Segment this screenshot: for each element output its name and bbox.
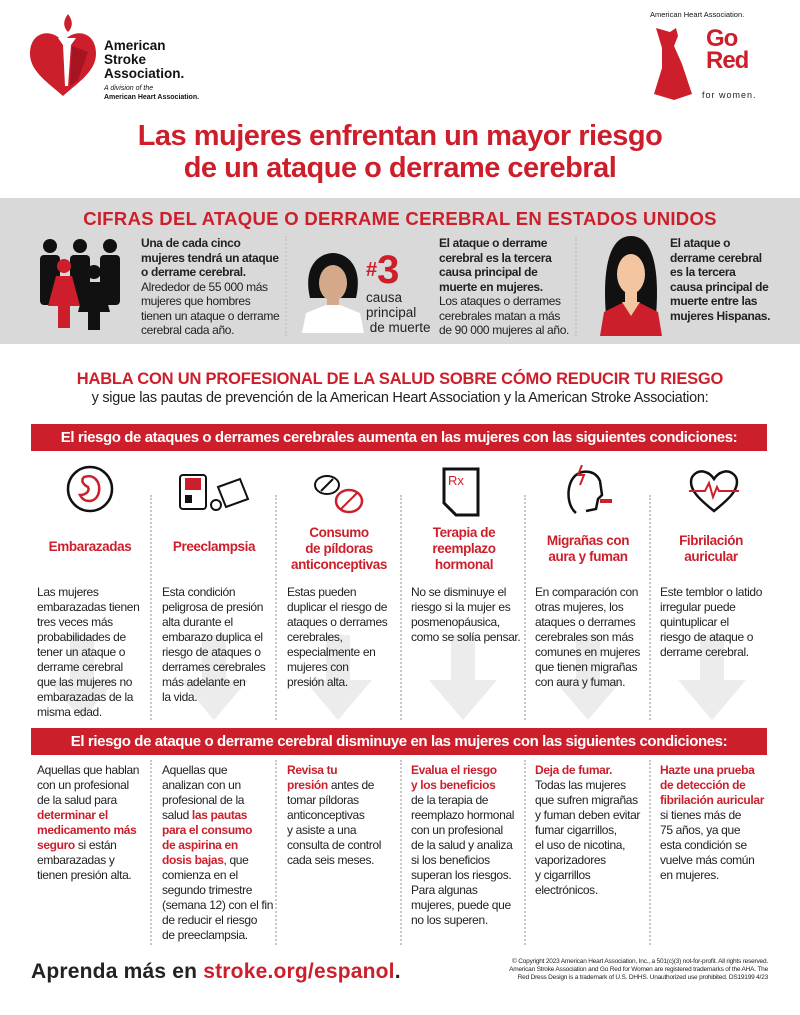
bottom column 5 bbox=[535, 763, 640, 897]
bottom column 6: en mujeres. bbox=[660, 868, 719, 882]
column 5: migraines bbox=[535, 465, 640, 689]
text bbox=[37, 585, 140, 719]
logo: American Stroke Association: American Heart Association. bbox=[104, 94, 199, 101]
text: cerebrales son más bbox=[535, 630, 633, 644]
bottom column 2: Aquellas que bbox=[162, 763, 227, 777]
bottom column 2 bbox=[162, 763, 273, 942]
text: quintuplicar el bbox=[660, 615, 729, 629]
text: posmenopáusica, bbox=[411, 615, 500, 629]
icon: hispanic woman bbox=[600, 236, 662, 336]
text: derrames cerebrales bbox=[162, 660, 265, 674]
banner: risk increases bbox=[31, 424, 767, 451]
text: tres veces más bbox=[37, 615, 113, 629]
title: de un ataque o derrame cerebral bbox=[184, 152, 616, 184]
bottom column 5: vaporizadores bbox=[535, 853, 606, 867]
panel: stats band bbox=[0, 198, 800, 344]
logo: American Stroke Association: A division of the bbox=[104, 85, 153, 92]
column 4: hormone therapy bbox=[411, 468, 520, 644]
text: En comparación con bbox=[535, 585, 638, 599]
text: Este temblor o latido bbox=[660, 585, 762, 599]
title bbox=[138, 120, 662, 184]
text: misma edad. bbox=[37, 705, 102, 719]
bottom column 5: electrónicos. bbox=[535, 883, 598, 897]
text bbox=[660, 585, 762, 659]
bottom column 1: determinar el bbox=[37, 808, 108, 822]
stat: #3 cause: principal bbox=[366, 305, 416, 320]
heading: aura y fuman bbox=[548, 549, 628, 564]
heading: Terapia de bbox=[433, 525, 495, 540]
text: one in five: mujeres que hombres bbox=[141, 294, 250, 308]
stats heading: CIFRAS DEL ATAQUE O DERRAME CEREBRAL EN ESTADOS UNIDOS bbox=[83, 208, 717, 229]
text: comunes en mujeres bbox=[535, 645, 640, 659]
text: hispanic women: es la tercera bbox=[670, 265, 736, 279]
bottom column 6: de detección de bbox=[660, 778, 745, 792]
icon: prescription bbox=[442, 468, 480, 516]
text: third cause: de 90 000 mujeres al año. bbox=[439, 323, 569, 337]
footer: copyright: Red Dress Design is a trademark of U.S. DHHS. Unauthorized use prohibited. DS19199 4/23 bbox=[518, 974, 768, 981]
text: third cause: cerebrales matan a más bbox=[439, 308, 560, 322]
heading: de píldoras bbox=[305, 541, 373, 556]
icon: blood pressure monitor bbox=[179, 474, 250, 511]
footer: learn more: Aprenda más en stroke.org/espanol. bbox=[31, 960, 401, 983]
text: riesgo de ataques o bbox=[162, 645, 261, 659]
text: Esta condición bbox=[162, 585, 235, 599]
bottom column 2: segundo trimestre bbox=[162, 883, 252, 897]
arrows (background) bbox=[49, 635, 746, 720]
heading: Preeclampsia bbox=[173, 539, 255, 554]
bottom column 6: si tienes más de bbox=[660, 808, 741, 822]
bottom column 5: y cigarrillos bbox=[535, 868, 590, 882]
logo: Go Red for Women: Go bbox=[706, 25, 737, 52]
bottom column 6: Hazte una prueba bbox=[660, 763, 754, 777]
logo: Go Red for Women: American Heart Association. bbox=[650, 10, 744, 19]
stat: #3 cause: de muerte bbox=[370, 320, 431, 335]
heading bbox=[291, 525, 387, 572]
text: como se solía pensar. bbox=[411, 630, 520, 644]
bottom column 4: y los beneficios bbox=[411, 778, 495, 792]
heading: talk to a professional: HABLA CON UN PROFESIONAL DE LA SALUD SOBRE CÓMO REDUCIR TU RIESGO bbox=[77, 370, 723, 388]
text: hispanic women: derrame cerebral bbox=[670, 250, 762, 264]
text: peligrosa de presión bbox=[162, 600, 263, 614]
text: ataques o derrames bbox=[287, 615, 387, 629]
text bbox=[535, 585, 640, 689]
bottom column 4 bbox=[411, 763, 514, 927]
text: one in five: Una de cada cinco bbox=[141, 236, 240, 250]
bottom column 3: anticonceptivas bbox=[287, 808, 364, 822]
icon: group of women bbox=[40, 239, 120, 330]
heading: reemplazo bbox=[432, 541, 496, 556]
bottom column 1: Aquellas que hablan bbox=[37, 763, 139, 777]
text: one in five: mujeres tendrá un ataque bbox=[141, 250, 279, 264]
heading bbox=[547, 533, 629, 564]
heading: Migrañas con bbox=[547, 533, 629, 548]
text: otras mujeres, los bbox=[535, 600, 623, 614]
bottom column 3: y asiste a una bbox=[287, 823, 356, 837]
bottom column 1: de la salud para bbox=[37, 793, 117, 807]
text: hispanic women bbox=[670, 236, 770, 322]
bottom column 3: cada seis meses. bbox=[287, 853, 374, 867]
stat: #3 cause: causa bbox=[366, 290, 402, 305]
logo: American Stroke Association bbox=[30, 14, 199, 101]
text: hispanic women: El ataque o bbox=[670, 236, 730, 250]
bottom column 2: de aspirina en bbox=[162, 838, 238, 852]
logo: Go Red for Women: for women. bbox=[702, 90, 757, 100]
title: Las mujeres enfrentan un mayor riesgo bbox=[138, 120, 662, 152]
bottom column 2: de reducir el riesgo bbox=[162, 913, 257, 927]
stat: #3 cause: #3 bbox=[366, 248, 399, 292]
text: mujeres con bbox=[287, 660, 349, 674]
bottom column 4: no los superen. bbox=[411, 913, 488, 927]
bottom column 4: mujeres, puede que bbox=[411, 898, 511, 912]
bottom column 5: y fuman deben evitar bbox=[535, 808, 640, 822]
logo: American Stroke Association: Association. bbox=[104, 66, 184, 81]
bottom column 2: profesional de la bbox=[162, 793, 244, 807]
text: Estas pueden bbox=[287, 585, 356, 599]
bottom column 5: Deja de fumar. bbox=[535, 763, 612, 777]
text: presión alta. bbox=[287, 675, 348, 689]
bottom column 1: con un profesional bbox=[37, 778, 129, 792]
bottom column 2: comienza en el bbox=[162, 868, 238, 882]
icon: pills bbox=[314, 475, 364, 514]
text: third cause: muerte en mujeres. bbox=[439, 280, 543, 294]
bottom column 2: analizan con un bbox=[162, 778, 241, 792]
text: derrame cerebral. bbox=[660, 645, 749, 659]
bottom column 3: Revisa tu bbox=[287, 763, 337, 777]
text: third cause: cerebral es la tercera bbox=[439, 250, 551, 264]
text: probabilidades de bbox=[37, 630, 126, 644]
text: embarazo duplica el bbox=[162, 630, 263, 644]
bottom column 2: (semana 12) con el fin bbox=[162, 898, 273, 912]
column 2: Preeclampsia bbox=[162, 474, 266, 704]
icon: heart with pulse bbox=[689, 470, 739, 513]
bottom column 5: fumar cigarrillos, bbox=[535, 823, 617, 837]
bottom column 3 bbox=[287, 763, 381, 867]
logo: Go Red for Women: Red bbox=[706, 47, 748, 74]
text: third cause bbox=[439, 236, 569, 337]
text: alta durante el bbox=[162, 615, 233, 629]
text bbox=[162, 585, 266, 704]
text: riesgo de ataque o bbox=[660, 630, 753, 644]
bottom column 3: consulta de control bbox=[287, 838, 381, 852]
text: one in five: o derrame cerebral. bbox=[141, 265, 246, 279]
text: hispanic women: mujeres Hispanas. bbox=[670, 308, 770, 322]
footer: copyright: American Stroke Association and Go Red for Women are registered trademarks of the AHA. The bbox=[509, 966, 768, 973]
bottom column 6: 75 años, ya que bbox=[660, 823, 740, 837]
text: la vida. bbox=[162, 690, 197, 704]
bottom column 5: que sufren migrañas bbox=[535, 793, 638, 807]
bottom column 1: embarazadas y bbox=[37, 853, 114, 867]
stat: #3 cause bbox=[366, 248, 431, 335]
text: one in five: tienen un ataque o derrame bbox=[141, 308, 279, 322]
bottom column 1: medicamento más bbox=[37, 823, 136, 837]
heading: anticonceptivas bbox=[291, 557, 387, 572]
text: one in five bbox=[141, 236, 280, 337]
heading: Fibrilación bbox=[679, 533, 743, 548]
text: que tienen migrañas bbox=[535, 660, 637, 674]
bottom column 4: de la terapia de bbox=[411, 793, 488, 807]
heading bbox=[432, 525, 496, 572]
bottom column 4: con un profesional bbox=[411, 823, 503, 837]
logo: American Stroke Association: American bbox=[104, 38, 166, 53]
bottom column 2: para el consumo bbox=[162, 823, 252, 837]
text: third cause: causa principal de bbox=[439, 265, 537, 279]
logo: Go Red for Women bbox=[650, 10, 757, 100]
text: que las mujeres no bbox=[37, 675, 132, 689]
icon: head with migraine and cigarette bbox=[567, 465, 612, 514]
heading: Consumo bbox=[309, 525, 369, 540]
footer: copyright bbox=[440, 958, 768, 982]
text: con aura y fuman. bbox=[535, 675, 625, 689]
column 6: atrial fibrillation bbox=[660, 470, 762, 659]
text: duplicar el riesgo de bbox=[287, 600, 387, 614]
footer: copyright: © Copyright 2023 American Heart Association, Inc., a 501(c)(3) not-for-profit. All rights reserved. bbox=[512, 958, 768, 965]
heading: Embarazadas bbox=[49, 539, 131, 554]
bottom column 4: de la salud y analiza bbox=[411, 838, 512, 852]
dividers bbox=[150, 495, 152, 720]
heading bbox=[679, 533, 743, 564]
text: embarazadas de la bbox=[37, 690, 133, 704]
text: especialmente en bbox=[287, 645, 375, 659]
bottom column 3: tomar píldoras bbox=[287, 793, 359, 807]
bottom column 4: Evalua el riesgo bbox=[411, 763, 497, 777]
bottom column 3: presión antes de bbox=[287, 778, 374, 792]
text: ataques o derrames bbox=[535, 615, 635, 629]
text: third cause: El ataque o derrame bbox=[439, 236, 547, 250]
text: más adelante en bbox=[162, 675, 245, 689]
text: riesgo si la mujer es bbox=[411, 600, 510, 614]
text: tener un ataque o bbox=[37, 645, 125, 659]
heading: talk to a professional bbox=[77, 369, 723, 406]
text: one in five: Alrededor de 55 000 más bbox=[141, 280, 268, 294]
bottom column 4: Para algunas bbox=[411, 883, 478, 897]
logo: American Stroke Association: Stroke bbox=[104, 52, 146, 67]
bottom column 1 bbox=[37, 763, 139, 882]
banner: risk increases: El riesgo de ataques o derrames cerebrales aumenta en las mujeres con las siguientes condiciones: bbox=[61, 429, 737, 446]
text: embarazadas tienen bbox=[37, 600, 139, 614]
text: one in five: cerebral cada año. bbox=[141, 323, 234, 337]
heading: talk to a professional: y sigue las pautas de prevención de la American Heart Association y la American Stroke Association: bbox=[92, 390, 708, 406]
text: third cause: Los ataques o derrames bbox=[439, 294, 561, 308]
bottom column 2: dosis bajas, que bbox=[162, 853, 248, 867]
bottom column 4: si los beneficios bbox=[411, 853, 490, 867]
text: Las mujeres bbox=[37, 585, 99, 599]
heading: hormonal bbox=[435, 557, 493, 572]
text bbox=[411, 585, 520, 644]
text: derrame cerebral bbox=[37, 660, 123, 674]
text bbox=[287, 585, 388, 689]
banner: risk decreases: El riesgo de ataque o derrame cerebral disminuye en las mujeres con las siguientes condiciones: bbox=[71, 733, 727, 750]
icon: woman portrait bbox=[302, 253, 364, 333]
bottom column 6 bbox=[660, 763, 764, 882]
text: hispanic women: causa principal de bbox=[670, 280, 768, 294]
heading: auricular bbox=[684, 549, 738, 564]
text: No se disminuye el bbox=[411, 585, 506, 599]
bottom column 4: superan los riesgos. bbox=[411, 868, 511, 882]
bottom column 1: tienen presión alta. bbox=[37, 868, 131, 882]
text: hispanic women: muerte entre las bbox=[670, 294, 757, 308]
bottom column 1: seguro si están bbox=[37, 838, 116, 852]
icon: fetus bbox=[66, 466, 114, 512]
icon: prescription: Rx bbox=[448, 473, 464, 488]
bottom column 5: el uso de nicotina, bbox=[535, 838, 625, 852]
column 3: pills bbox=[287, 475, 388, 689]
bottom column 6: vuelve más común bbox=[660, 853, 754, 867]
bottom column 6: fibrilación auricular bbox=[660, 793, 764, 807]
bottom column 2: salud las pautas bbox=[162, 808, 247, 822]
bottom column 6: esta condición se bbox=[660, 838, 747, 852]
column 1: Embarazadas bbox=[37, 466, 140, 719]
bottom column 5: Todas las mujeres bbox=[535, 778, 626, 792]
text: cerebrales, bbox=[287, 630, 343, 644]
bottom column 4: reemplazo hormonal bbox=[411, 808, 514, 822]
banner: risk decreases bbox=[31, 728, 767, 755]
bottom column 2: de preeclampsia. bbox=[162, 928, 248, 942]
text: irregular puede bbox=[660, 600, 735, 614]
